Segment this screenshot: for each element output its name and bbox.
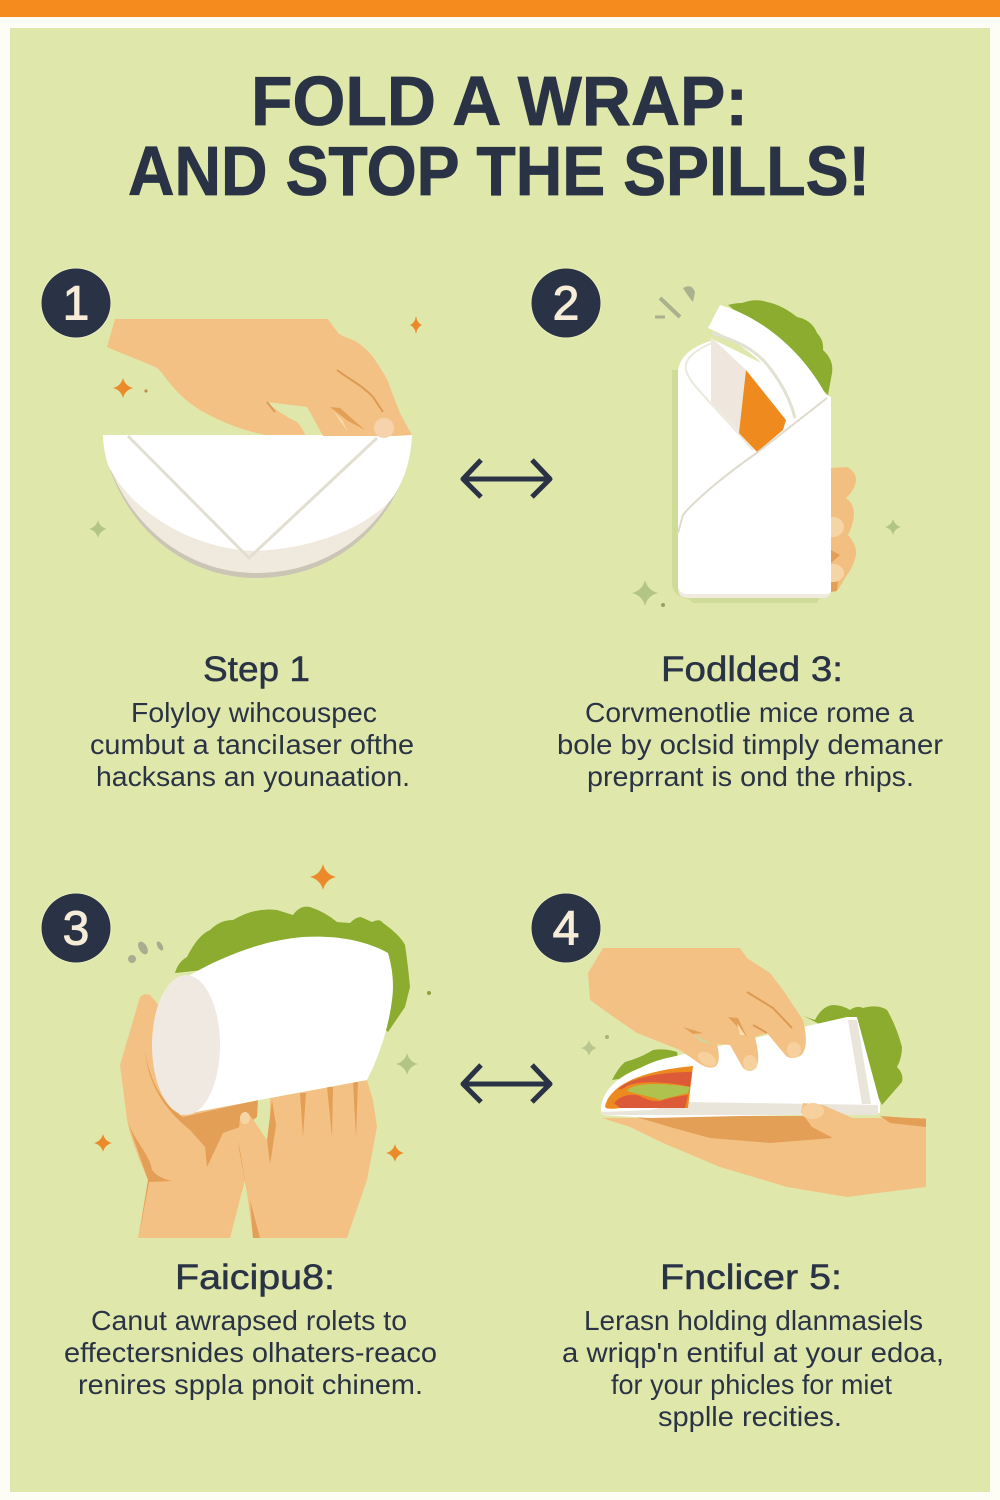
step 3 text: Canut awrapsed rolets to [91,1305,407,1336]
step 3 illustration: two hands holding wrap [94,864,431,1238]
step 4 heading: Fnclicer 5: [660,1258,842,1297]
double arrow 1 [463,460,550,497]
step 4 badge: 4 [553,902,579,956]
step 3 badge: 3 [63,902,89,956]
step 2 heading: Fodlded 3: [661,650,843,689]
title: AND STOP THE SPILLS! [128,132,870,210]
step 4 text: spplle recities. [658,1401,842,1432]
step 4 text: for your phicles for miet [611,1369,892,1400]
step 4 badge [530,892,602,964]
step 3 heading: Faicipu8: [175,1258,335,1297]
step 1 text: cumbut a tanciIaser ofthe [90,729,414,760]
step 3 badge [40,892,112,964]
title: FOLD A WRAP: [251,62,748,140]
step 2 text: preprrant is ond the rhips. [587,761,914,792]
step 2 text: Corvmenotlie mice rome a [585,697,914,728]
step 3 text: renires sppla pnoit chinem. [78,1369,423,1400]
step 1 text: Folyloy wihcouspec [131,697,377,728]
step 2 badge [530,268,602,338]
step 1 heading: Step 1 [203,650,310,689]
step 2 text: bole by oclsid timply demaner [557,729,943,760]
step 4 text: Lerasn holding dlanmasiels [584,1305,923,1336]
step 1 text [90,697,414,792]
step 4 text: a wriqp'n entiful at your edoa, [562,1337,944,1368]
title [128,62,870,210]
step 3 text [64,1305,437,1400]
step 4 text [562,1305,944,1432]
step 1 badge: 1 [63,278,89,330]
step 1 illustration: hand folding tortilla [89,316,422,578]
step 4 illustration: hand holding open wrap [581,948,926,1197]
step 2 illustration: folded wrap in hand [632,286,901,607]
step 2 badge: 2 [553,278,579,330]
double arrow 2 [463,1065,550,1102]
top orange bar [0,0,1000,17]
step 1 badge [40,268,112,338]
step 2 text [557,697,943,792]
step 3 text: effectersnides olhaters-reaco [64,1337,437,1368]
step 1 text: hacksans an younaation. [96,761,410,792]
